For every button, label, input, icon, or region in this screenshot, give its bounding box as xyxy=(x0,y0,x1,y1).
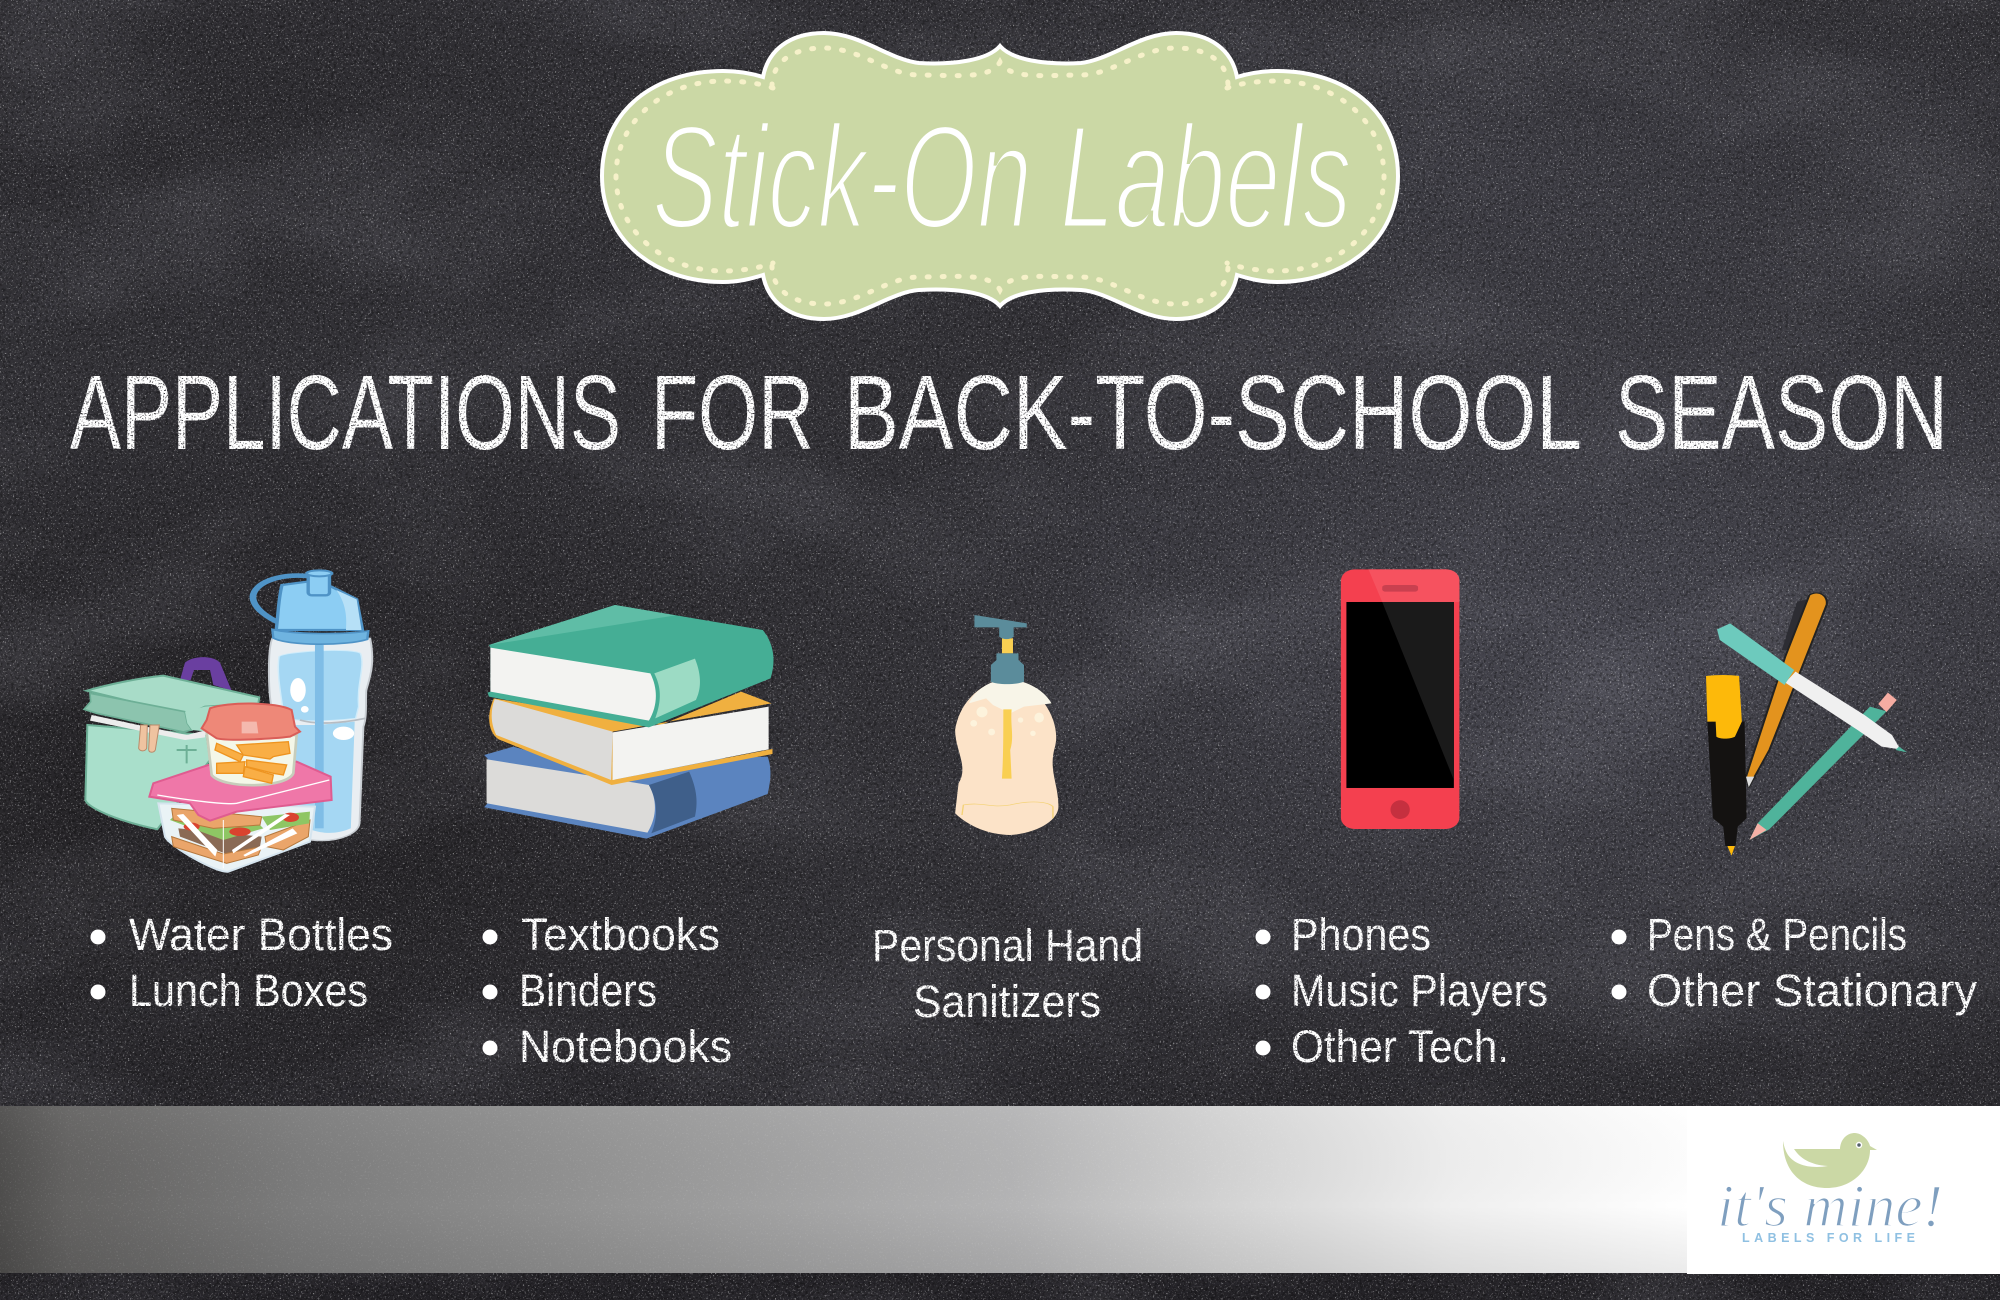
items: Water Bottles xyxy=(129,909,393,960)
screen glare xyxy=(1382,602,1454,780)
items: Textbooks xyxy=(521,909,720,960)
items xyxy=(1291,909,1548,1072)
bubbles xyxy=(970,707,1044,736)
badge dotted stitching xyxy=(616,48,1384,304)
teal pen xyxy=(1717,623,1907,752)
bullets xyxy=(1256,930,1270,1056)
items: Other Tech. xyxy=(1291,1021,1509,1072)
green pencil xyxy=(1749,693,1897,840)
badge shape xyxy=(602,33,1398,319)
pump xyxy=(974,615,1027,684)
title badge xyxy=(602,33,1398,319)
teal book xyxy=(488,605,774,727)
icon: stack of books xyxy=(484,605,774,839)
heading: FOR xyxy=(651,354,814,472)
items: Lunch Boxes xyxy=(129,965,368,1016)
logo tagline: LABELS FOR LIFE xyxy=(1742,1231,1915,1245)
speaker xyxy=(1382,585,1418,592)
bullets xyxy=(1612,930,1626,1000)
label: personal hand sanitizers: Personal Hand xyxy=(872,920,1143,971)
icon: water bottle and lunch boxes xyxy=(84,570,372,872)
phone highlight xyxy=(1368,569,1459,602)
logo script: it's mine! xyxy=(1717,1173,1943,1239)
jar xyxy=(202,704,300,785)
white panel xyxy=(1687,1106,2000,1274)
bottle body xyxy=(955,678,1058,835)
items: Music Players xyxy=(1291,965,1548,1016)
sandwich container xyxy=(149,762,332,872)
items: Other Stationary xyxy=(1647,965,1978,1016)
water bottle xyxy=(253,570,372,841)
heading: APPLICATIONS xyxy=(70,354,621,472)
label: personal hand sanitizers: Sanitizers xyxy=(913,976,1101,1027)
list: textbooks, binders, notebooks xyxy=(482,909,732,1072)
home button xyxy=(1390,800,1410,819)
bullets xyxy=(482,930,498,1056)
bullets xyxy=(90,930,106,1000)
foam top xyxy=(969,678,1052,713)
items: Binders xyxy=(519,965,657,1016)
icon: pens and pencils xyxy=(1706,593,1907,856)
items: Pens & Pencils xyxy=(1647,909,1907,960)
lunch box xyxy=(84,657,259,829)
phone body xyxy=(1341,569,1459,829)
items: Phones xyxy=(1291,909,1431,960)
bottom gradient band xyxy=(0,1106,1690,1273)
heading: BACK-TO-SCHOOL xyxy=(844,354,1582,472)
title text: Stick-On Labels xyxy=(652,95,1352,260)
items: Notebooks xyxy=(519,1021,732,1072)
label: personal hand sanitizers xyxy=(872,920,1143,1027)
items xyxy=(519,909,732,1072)
heading xyxy=(70,354,1948,472)
icon: smartphone xyxy=(1341,569,1459,829)
icon: bird xyxy=(1783,1133,1877,1188)
soap streak xyxy=(1002,709,1012,779)
items xyxy=(1647,909,1978,1016)
marker xyxy=(1706,675,1747,856)
logo panel xyxy=(1687,1106,2000,1274)
blue book xyxy=(484,747,770,839)
list: pens, pencils, stationary xyxy=(1612,909,1978,1016)
items xyxy=(129,909,393,1016)
orange pencil xyxy=(1746,593,1827,787)
icon: soap dispenser xyxy=(955,615,1058,835)
list: phones, music players, other tech xyxy=(1256,909,1548,1072)
inner wave xyxy=(962,802,1053,818)
yellow book xyxy=(489,692,773,785)
phone screen xyxy=(1346,602,1454,788)
list: water bottles, lunch boxes xyxy=(90,909,393,1016)
